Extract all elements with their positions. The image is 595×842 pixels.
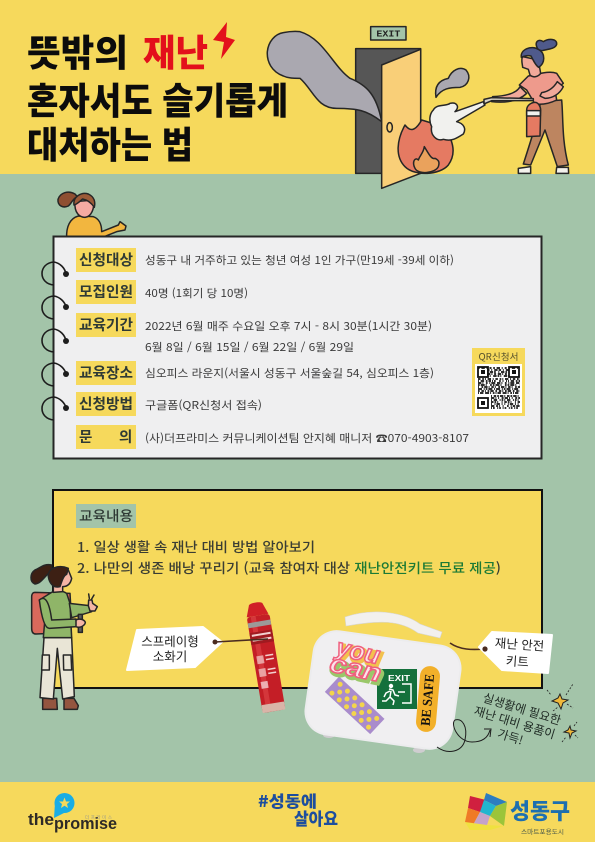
door leaf bbox=[382, 49, 421, 188]
door frame bbox=[356, 49, 421, 173]
content background bbox=[53, 490, 542, 688]
illustration: spray extinguisher bbox=[245, 601, 285, 713]
icon: lightning bolt bbox=[213, 22, 235, 59]
hair bbox=[521, 48, 544, 67]
QR code card: QR신청서 bbox=[478, 350, 518, 363]
row: target: 신청대상 bbox=[79, 249, 133, 270]
callout: safety kit tag bbox=[450, 632, 552, 673]
sticker: purple band bbox=[325, 677, 384, 734]
logo: the promise: the bbox=[28, 810, 54, 829]
pockets bbox=[42, 655, 72, 670]
logo: the promise: promise bbox=[54, 814, 117, 833]
header band bbox=[0, 0, 595, 174]
boots bbox=[43, 698, 78, 709]
panel background bbox=[54, 236, 542, 458]
row: contact: 문 bbox=[79, 426, 92, 447]
neck and face bbox=[522, 57, 541, 77]
exit sign: EXIT bbox=[376, 29, 401, 39]
neck and face bbox=[53, 570, 72, 592]
row: contact: (사)더프라미스 커뮤니케이션팀 안지혜 매니저 ☎070-4903-8107 bbox=[145, 430, 469, 446]
torso bbox=[519, 72, 563, 104]
hose and nozzle bbox=[484, 98, 533, 104]
row: period: 2022년 6월 매주 수요일 오후 7시 - 8시 30분(1시간 30분) bbox=[145, 318, 432, 334]
row: contact bbox=[79, 426, 469, 447]
panel: course content bbox=[53, 490, 542, 688]
hair bbox=[48, 567, 68, 587]
sticker: you can bbox=[327, 633, 389, 690]
title bbox=[27, 23, 288, 169]
feet bbox=[413, 747, 425, 753]
logo: the promise: 더프라미스 bbox=[85, 814, 112, 821]
sticker: you can: can bbox=[327, 650, 384, 688]
callout: safety kit tag: 키트 bbox=[505, 650, 530, 671]
row: target: 성동구 내 거주하고 있는 청년 여성 1인 가구(만19세 -39세 이하) bbox=[145, 252, 454, 268]
arrow: curly hand-drawn bbox=[437, 720, 491, 751]
handwritten note: 가득! bbox=[495, 725, 525, 749]
illustration: girl leaning over panel bbox=[58, 192, 126, 238]
row: contact: 의 bbox=[119, 426, 132, 447]
ponytail bbox=[536, 39, 557, 51]
title: 혼자서도 슬기롭게 bbox=[27, 71, 288, 125]
small smoke puff bbox=[436, 68, 469, 97]
woman with extinguisher bbox=[484, 39, 569, 173]
extinguisher bbox=[527, 102, 541, 137]
callout: spray extinguisher tag bbox=[127, 627, 268, 670]
row: method: 신청방법 bbox=[79, 393, 133, 414]
panel: application details bbox=[42, 236, 542, 458]
logo: seongdong-gu: 스마트포용도시 bbox=[521, 826, 564, 836]
illustration: exit door with fire and smoke bbox=[267, 27, 569, 188]
title: 뜻밖의 bbox=[27, 23, 128, 77]
callout: spray extinguisher tag: 스프레이형 bbox=[141, 631, 199, 650]
heading chip: 교육내용 bbox=[79, 506, 133, 526]
logo: seongdong-gu: 성동구 bbox=[510, 794, 570, 826]
arms bbox=[39, 598, 77, 628]
case body bbox=[301, 627, 465, 753]
binder rings bbox=[42, 262, 69, 420]
content line 2: 2. 나만의 생존 배낭 꾸리기 (교육 참여자 대상 재난안전키트 무료 제공 ) bbox=[77, 557, 501, 577]
sticker: you can: you bbox=[332, 633, 383, 670]
footer band bbox=[0, 782, 595, 842]
sticker: be safe: BE SAFE bbox=[418, 673, 437, 727]
jacket bbox=[39, 591, 72, 638]
row: method bbox=[79, 393, 262, 414]
row: method: 구글폼(QR신청서 접속) bbox=[145, 397, 262, 413]
logo: seongdong-gu bbox=[465, 793, 570, 836]
hands and stick bbox=[78, 614, 82, 632]
slogan: 살아요 bbox=[294, 805, 338, 830]
sticker: exit sign: EXIT bbox=[388, 673, 411, 683]
extinguisher spray cloud bbox=[430, 102, 485, 140]
legs bbox=[523, 100, 568, 167]
arms bbox=[492, 87, 527, 102]
door knob bbox=[387, 123, 392, 132]
logo: the promise bbox=[28, 793, 117, 833]
mosaic emblem bbox=[465, 793, 507, 830]
title: 대처하는 법 bbox=[27, 115, 193, 169]
callout: safety kit tag: 재난 안전 bbox=[494, 632, 545, 655]
sticker: exit sign bbox=[377, 669, 417, 709]
row: target bbox=[79, 249, 454, 270]
sticker: you can: can bbox=[329, 652, 385, 690]
smoke bbox=[267, 31, 382, 122]
row: period bbox=[79, 314, 432, 355]
trousers bbox=[40, 638, 74, 699]
slogan: #성동에 bbox=[258, 788, 317, 812]
spark marks bbox=[89, 594, 94, 599]
title: 재난 bbox=[143, 23, 208, 77]
handle bbox=[345, 612, 442, 638]
handwritten note: 실생활에 필요한 bbox=[481, 689, 563, 729]
exit sign bbox=[371, 27, 406, 40]
handwritten note: 재난 대비 용품이 bbox=[472, 702, 557, 743]
illustration: hiker with backpack bbox=[31, 565, 97, 709]
row: period: 교육기간 bbox=[79, 314, 133, 335]
backpack bbox=[32, 592, 71, 634]
row: venue bbox=[79, 362, 434, 383]
shoes bbox=[518, 167, 569, 173]
row: recruits: 모집인원 bbox=[79, 281, 133, 302]
row: recruits: 40명 (1회기 당 10명) bbox=[145, 285, 248, 301]
row: venue: 심오피스 라운지(서울시 성동구 서울숲길 54, 심오피스 1층) bbox=[145, 365, 434, 381]
content line 1: 1. 일상 생활 속 재난 대비 방법 알아보기 bbox=[77, 536, 315, 556]
QR code card bbox=[472, 348, 525, 416]
row: recruits bbox=[79, 281, 248, 302]
callout: spray extinguisher tag: 소화기 bbox=[153, 646, 187, 665]
flame bbox=[398, 120, 453, 173]
slogan bbox=[258, 788, 338, 830]
handwritten note bbox=[468, 688, 563, 757]
row: venue: 교육장소 bbox=[79, 362, 133, 383]
ponytail bbox=[31, 565, 52, 584]
label chips bbox=[76, 248, 136, 449]
illustration: safety kit case bbox=[301, 612, 465, 753]
sticker: you can: you bbox=[333, 635, 384, 672]
icon: sparkles bbox=[547, 684, 578, 742]
row: period: 6월 8일 / 6월 15일 / 6월 22일 / 6월 29일 bbox=[145, 339, 354, 355]
sticker: be safe bbox=[415, 665, 441, 733]
inner flame bbox=[414, 147, 439, 173]
